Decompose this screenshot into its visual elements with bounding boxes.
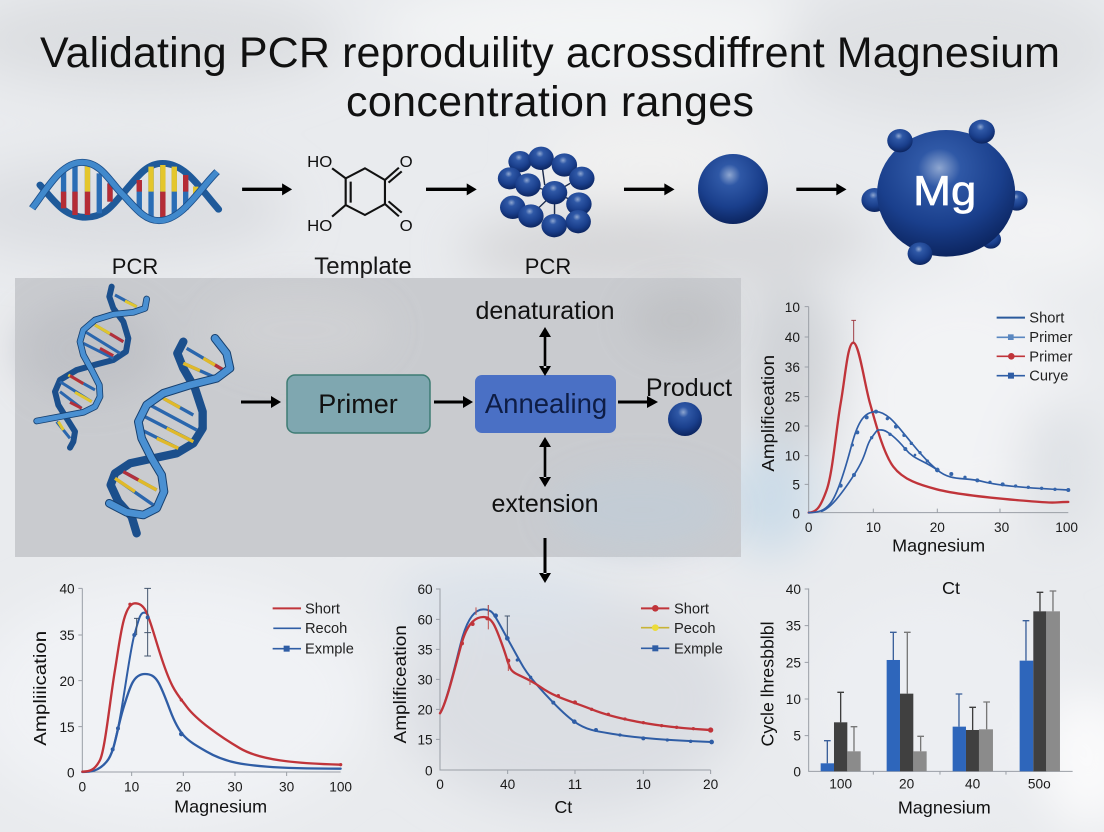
legend: Exmple bbox=[674, 642, 723, 658]
arrow bbox=[618, 396, 658, 408]
y axis numbers bbox=[59, 582, 75, 780]
arrow bbox=[242, 183, 292, 195]
x axis numbers: 0 bbox=[805, 520, 813, 535]
arrow bbox=[624, 183, 675, 195]
y axis numbers: 60 bbox=[417, 612, 433, 627]
x axis numbers bbox=[436, 777, 719, 792]
legend: Short bbox=[305, 601, 340, 617]
arrow bbox=[434, 396, 473, 408]
helix one bbox=[37, 287, 147, 448]
icon: magnesium sphere bbox=[698, 154, 768, 224]
icon: molecule cluster bbox=[498, 147, 595, 237]
x axis numbers: 10 bbox=[636, 777, 651, 792]
label: Product: Product bbox=[646, 374, 732, 402]
y axis numbers: 10 bbox=[785, 449, 800, 464]
x axis numbers: 0 bbox=[79, 779, 87, 794]
chart: amplification bottom left: Ampliiication bbox=[30, 631, 50, 746]
double arrow bbox=[539, 327, 551, 376]
chart: cycle threshold bars bbox=[757, 578, 1073, 817]
legend: Primer bbox=[1029, 349, 1073, 365]
icon: chemical structure: O bbox=[400, 153, 413, 171]
blue curves bbox=[809, 412, 1068, 513]
red curve bbox=[809, 343, 1068, 513]
helix two bbox=[109, 338, 230, 533]
icon: product sphere bbox=[668, 402, 702, 436]
blue curve bbox=[440, 609, 712, 742]
title bbox=[40, 29, 1060, 126]
legend bbox=[273, 601, 354, 658]
y axis numbers: 5 bbox=[792, 477, 800, 492]
x axis numbers: 20 bbox=[176, 779, 191, 794]
arrow down bbox=[539, 538, 551, 583]
y axis numbers: 5 bbox=[793, 729, 801, 744]
y axis numbers: 35 bbox=[59, 628, 75, 643]
icon: Mg sphere with satellites bbox=[861, 120, 1028, 265]
icon: DNA helix pair bbox=[37, 287, 230, 533]
y axis numbers: 0 bbox=[425, 763, 433, 778]
x axis numbers: 100 bbox=[1055, 520, 1078, 535]
y axis numbers: 10 bbox=[785, 300, 800, 315]
legend: Primer bbox=[1029, 330, 1073, 346]
x axis numbers: 10 bbox=[866, 520, 881, 535]
arrow bbox=[796, 183, 847, 195]
y axis numbers bbox=[785, 300, 800, 521]
icon: chemical structure bbox=[307, 153, 413, 235]
legend: Exmple bbox=[305, 642, 354, 658]
chart: amplification top right: Amplificeation bbox=[758, 355, 778, 472]
x axis numbers: 20 bbox=[930, 520, 945, 535]
chart: cycle threshold bars: Magnesium bbox=[898, 797, 991, 817]
y axis numbers: 40 bbox=[785, 330, 800, 345]
box: Annealing bbox=[475, 375, 616, 433]
legend: Curye bbox=[1029, 369, 1068, 385]
legend bbox=[997, 311, 1073, 385]
arrow bbox=[426, 183, 477, 195]
title: concentration ranges bbox=[346, 78, 754, 126]
x axis numbers: 50o bbox=[1028, 777, 1051, 792]
label: Template: Template bbox=[314, 253, 412, 280]
box: Primer bbox=[287, 375, 430, 433]
icon: Mg sphere with satellites: Mg bbox=[913, 169, 976, 215]
x axis numbers: 20 bbox=[703, 777, 719, 792]
x axis numbers: 0 bbox=[436, 777, 444, 792]
y axis numbers: 20 bbox=[417, 702, 433, 717]
x axis numbers: 11 bbox=[568, 777, 582, 792]
dark bars bbox=[834, 611, 1046, 771]
red curve bbox=[440, 617, 711, 730]
icon: DNA double helix bbox=[32, 162, 219, 221]
label: extension: extension bbox=[491, 490, 599, 518]
x axis numbers: 20 bbox=[899, 777, 915, 792]
label: PCR: PCR bbox=[525, 254, 571, 279]
x axis numbers: 10 bbox=[124, 779, 140, 794]
y axis numbers: 20 bbox=[59, 674, 75, 689]
y axis numbers: 0 bbox=[793, 765, 801, 780]
double arrow bbox=[539, 437, 551, 487]
y axis numbers: 20 bbox=[785, 419, 800, 434]
error bars bbox=[824, 591, 1056, 763]
x axis numbers: 30 bbox=[994, 520, 1010, 535]
icon: chemical structure: O bbox=[400, 217, 413, 235]
chart: cycle threshold bars: Cycle lhresbblbl bbox=[757, 621, 777, 746]
chart: amplification bottom left: Magnesium bbox=[174, 797, 267, 817]
y axis numbers: 60 bbox=[417, 582, 433, 597]
legend: Short bbox=[674, 601, 709, 617]
y axis numbers bbox=[786, 582, 801, 780]
y axis numbers: 25 bbox=[785, 390, 800, 405]
y axis numbers: 30 bbox=[417, 672, 433, 687]
legend: Pecoh bbox=[674, 621, 716, 637]
x axis numbers bbox=[79, 779, 352, 794]
label: denaturation: denaturation bbox=[475, 297, 615, 325]
x axis numbers: 100 bbox=[329, 779, 352, 794]
error bars bbox=[488, 605, 510, 638]
x axis numbers: 40 bbox=[965, 777, 981, 792]
arrow bbox=[241, 396, 281, 408]
y axis numbers: 40 bbox=[59, 582, 75, 597]
label: PCR: PCR bbox=[112, 254, 158, 279]
grey bars bbox=[847, 611, 1060, 771]
chart: amplification bottom centre bbox=[390, 582, 723, 817]
x axis numbers: 30 bbox=[279, 779, 295, 794]
panel: annealing workflow bbox=[15, 278, 741, 557]
x axis numbers: 30 bbox=[227, 779, 243, 794]
y axis numbers: 36 bbox=[785, 360, 800, 375]
chart: cycle threshold bars: Ct bbox=[942, 578, 960, 598]
y axis numbers: 25 bbox=[786, 655, 801, 670]
x axis numbers bbox=[829, 777, 1051, 792]
y axis numbers: 35 bbox=[786, 619, 801, 634]
box: Primer: Primer bbox=[318, 389, 398, 419]
y axis numbers: 40 bbox=[786, 582, 801, 597]
chart: amplification top right bbox=[758, 300, 1078, 555]
icon: chemical structure: HO bbox=[307, 217, 332, 235]
legend bbox=[641, 601, 723, 658]
red curve bbox=[82, 603, 341, 772]
title: Validating PCR reproduility acrossdiffrent Magnesium bbox=[40, 29, 1060, 77]
y axis numbers: 15 bbox=[417, 732, 433, 747]
x axis numbers: 40 bbox=[500, 777, 516, 792]
box: Annealing: Annealing bbox=[485, 388, 607, 419]
chart: amplification bottom left bbox=[30, 582, 354, 817]
error bars bbox=[134, 588, 151, 656]
y axis numbers: 10 bbox=[786, 692, 801, 707]
chart: amplification bottom centre: Ct bbox=[554, 797, 572, 817]
legend: Short bbox=[1029, 311, 1064, 327]
legend: Recoh bbox=[305, 621, 347, 637]
y axis numbers: 0 bbox=[67, 765, 75, 780]
y axis numbers bbox=[417, 582, 433, 778]
x axis numbers: 100 bbox=[829, 777, 852, 792]
icon: chemical structure: HO bbox=[307, 153, 332, 171]
chart: amplification bottom centre: Amplificeation bbox=[390, 625, 410, 743]
x axis numbers bbox=[805, 520, 1078, 535]
y axis numbers: 0 bbox=[792, 506, 800, 521]
y axis numbers: 35 bbox=[417, 642, 433, 657]
chart: amplification top right: Magnesium bbox=[892, 535, 985, 555]
blue curves bbox=[82, 674, 341, 772]
blue bars bbox=[821, 660, 1033, 771]
y axis numbers: 15 bbox=[59, 720, 75, 735]
